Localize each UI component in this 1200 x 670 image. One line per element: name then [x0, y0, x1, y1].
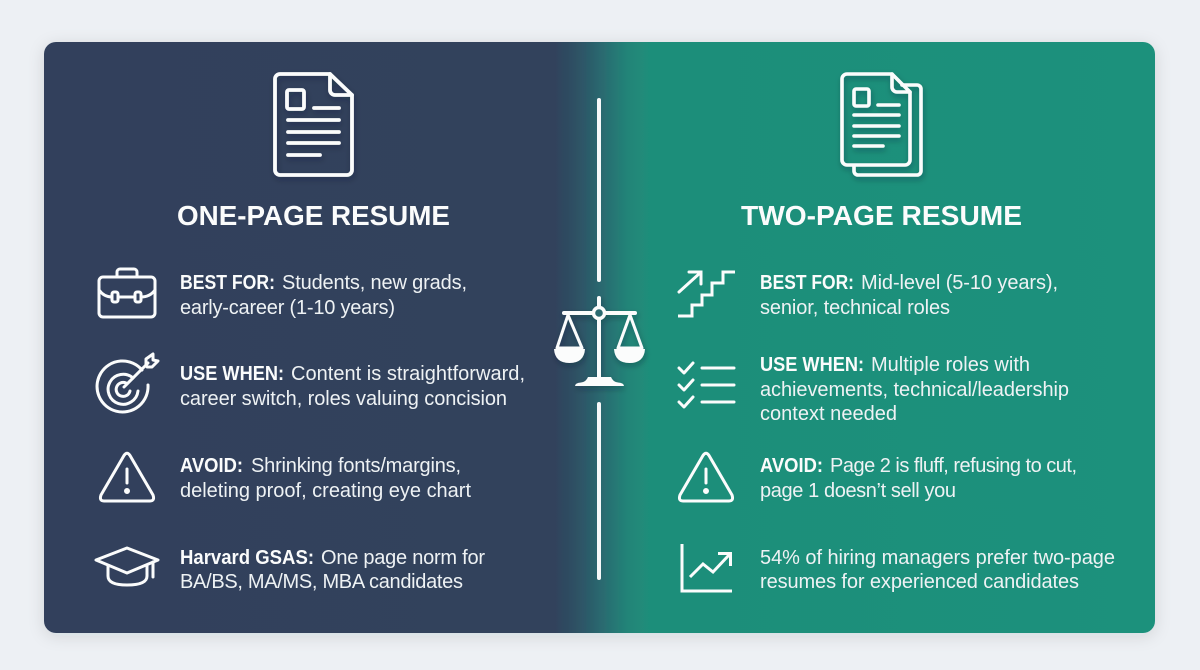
- text: avoid: deleting proof, creating eye chart: [180, 480, 471, 502]
- icon: target with arrow: [97, 354, 158, 412]
- row: avoid: [679, 453, 1077, 502]
- text: avoid: page 1 doesn’t sell you: [760, 480, 956, 502]
- panel: one-page resume: [96, 74, 525, 593]
- text: best for: Students, new grads,: [282, 272, 467, 294]
- text: use when: career switch, roles valuing concision: [180, 388, 507, 410]
- text: statistic: [760, 547, 1115, 593]
- text: use when: USE WHEN:: [760, 354, 864, 376]
- panel: two-page resume: [678, 74, 1115, 593]
- text: use when: Content is straightforward,: [291, 363, 525, 385]
- icon: stairs with arrow: [678, 272, 735, 316]
- text: best for: senior, technical roles: [760, 297, 950, 319]
- divider line: bottom: [597, 402, 601, 580]
- text: best for: BEST FOR:: [760, 272, 854, 294]
- text: best for: [760, 272, 1058, 319]
- heading: one-page resume: ONE-PAGE RESUME: [177, 200, 450, 231]
- text: use when: [180, 363, 525, 410]
- text: statistic: 54% of hiring managers prefer two-page: [760, 547, 1115, 569]
- row: use when: [97, 354, 525, 412]
- icon: checklist: [679, 363, 734, 407]
- text: statistic: resumes for experienced candidates: [760, 571, 1079, 593]
- text: best for: BEST FOR:: [180, 272, 275, 294]
- text: use when: [760, 354, 1069, 425]
- text: best for: early-career (1-10 years): [180, 297, 395, 319]
- icon: scale: [554, 298, 645, 386]
- row: use when: [679, 354, 1069, 425]
- divider line: top: [597, 98, 601, 282]
- text: avoid: [180, 455, 471, 502]
- divider: balance scale: [554, 98, 645, 580]
- icon: briefcase: [99, 269, 155, 317]
- text: best for: Mid-level (5-10 years),: [861, 272, 1058, 294]
- heading: two-page resume: TWO-PAGE RESUME: [741, 200, 1022, 231]
- text: best for: [180, 272, 467, 319]
- icon: single document: [275, 74, 352, 175]
- icon: rising line chart: [682, 544, 732, 591]
- text: harvard gsas: [180, 547, 485, 593]
- row: best for: [99, 269, 467, 319]
- text: avoid: [760, 455, 1077, 502]
- text: use when: achievements, technical/leadership: [760, 379, 1069, 401]
- row: best for: [678, 272, 1058, 319]
- text: avoid: Page 2 is fluff, refusing to cut,: [830, 455, 1077, 477]
- icon: warning triangle: [100, 453, 154, 501]
- text: avoid: AVOID:: [760, 455, 823, 477]
- row: harvard gsas: [96, 547, 485, 593]
- text: use when: context needed: [760, 403, 897, 425]
- icon: graduation cap: [96, 548, 158, 585]
- text: avoid: Shrinking fonts/margins,: [251, 455, 461, 477]
- text: harvard gsas: Harvard GSAS:: [180, 547, 314, 569]
- icon: warning triangle: [679, 453, 733, 501]
- text: use when: Multiple roles with: [871, 354, 1030, 376]
- row: avoid: [100, 453, 471, 502]
- icon: double document: [842, 74, 921, 175]
- text: harvard gsas: BA/BS, MA/MS, MBA candidates: [180, 571, 463, 593]
- row: statistic: [682, 544, 1115, 593]
- text: harvard gsas: One page norm for: [321, 547, 485, 569]
- text: use when: USE WHEN:: [180, 363, 284, 385]
- text: avoid: AVOID:: [180, 455, 243, 477]
